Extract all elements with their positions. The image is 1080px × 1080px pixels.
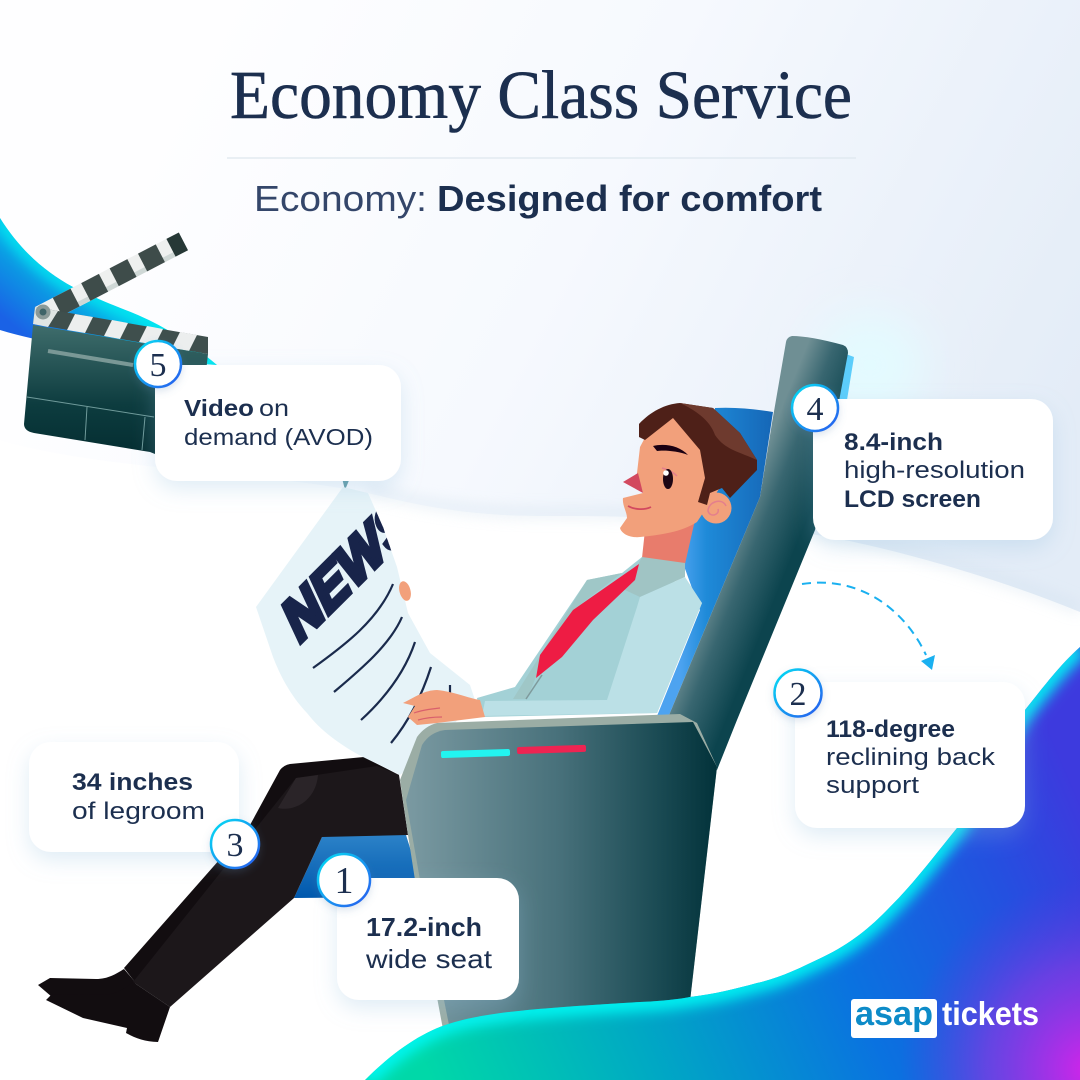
neck	[642, 520, 695, 564]
callout 1: seat width: 17.2-inch	[366, 912, 482, 942]
callout 1: seat width	[318, 854, 519, 1000]
callout 3: legroom: of legroom	[72, 798, 205, 825]
logo: asap tickets	[851, 995, 1039, 1038]
nose	[623, 473, 643, 493]
man: hand	[403, 690, 485, 725]
logo: asap tickets: tickets	[942, 995, 1039, 1032]
callout 2: reclining back support: 118-degree	[826, 716, 955, 743]
clapper stripe bar	[33, 307, 208, 354]
number badge 5: 5	[150, 347, 166, 384]
number badge 3	[211, 820, 259, 868]
tie	[536, 564, 639, 678]
clapper arm	[35, 232, 188, 325]
subtitle	[254, 178, 822, 219]
hair	[639, 403, 757, 505]
number badge 2	[774, 670, 822, 716]
clapper hinge	[36, 304, 50, 320]
number badge 4: 4	[806, 391, 824, 428]
wave edge shading	[368, 490, 1080, 609]
subtitle: Economy:	[254, 178, 427, 219]
number badge 1: 1	[334, 860, 354, 902]
armrest red light	[517, 745, 586, 754]
logo: asap tickets: asap	[855, 995, 933, 1033]
hair highlight	[680, 403, 757, 460]
knee highlight	[278, 775, 318, 809]
man: legs and shoes	[38, 757, 408, 1042]
number badge 1	[318, 854, 370, 906]
eye	[662, 468, 677, 489]
seat: blue head cushion	[657, 408, 773, 720]
icon: clapperboard	[24, 232, 208, 470]
callout 4: LCD screen: LCD screen	[844, 486, 981, 513]
callout 2: reclining back support: support	[826, 772, 919, 799]
newspaper headline: NEWS	[275, 480, 420, 657]
back shoe	[38, 969, 136, 997]
clapper body	[24, 325, 208, 470]
seat: light blue sliver	[838, 354, 854, 400]
arrow: dashed recline arrow	[802, 583, 935, 670]
eyebrow	[653, 445, 688, 455]
front leg	[133, 766, 408, 1007]
newspaper	[256, 480, 475, 775]
ear	[700, 492, 732, 524]
seat: armrest and base	[400, 714, 717, 1040]
background: white wave	[0, 440, 1080, 1080]
mouth	[628, 506, 651, 509]
top-left gradient wave	[0, 218, 217, 365]
callout 4: LCD screen: high-resolution	[844, 457, 1025, 484]
background: soft cyan glow	[815, 315, 925, 415]
callout 5: video on demand: demand (AVOD)	[184, 424, 373, 450]
callout 2: reclining back support: reclining back	[826, 744, 996, 771]
callout 2: reclining back support	[774, 670, 1025, 828]
armrest cyan light	[441, 749, 510, 758]
thumb	[397, 580, 413, 602]
callout 5: video on demand: Video	[184, 395, 254, 421]
bottom-right gradient wave	[360, 640, 1080, 1080]
seat: backrest	[660, 336, 848, 770]
seat: blue cushion under legs	[294, 835, 420, 898]
man: head and neck	[620, 403, 757, 564]
number badge 3: 3	[226, 827, 244, 864]
callout 3: legroom	[29, 742, 259, 868]
back leg	[124, 757, 399, 982]
callout 5: video on demand: on	[259, 395, 289, 421]
newspaper text lines	[313, 584, 450, 743]
callout 3: legroom: 34 inches	[72, 769, 193, 796]
title: Economy Class Service	[230, 57, 852, 133]
number badge 4	[792, 385, 838, 431]
callout 1: seat width: wide seat	[365, 944, 493, 974]
face	[620, 415, 725, 537]
callout 5: video on demand	[135, 341, 401, 481]
small seat strip behind newspaper	[342, 478, 350, 490]
man: shirt	[477, 557, 702, 717]
shirt placket	[526, 675, 542, 699]
front shoe	[46, 982, 170, 1042]
number badge 2: 2	[790, 676, 806, 713]
background: pale gradient area	[0, 0, 1080, 700]
number badge 5	[135, 341, 181, 387]
callout 4: LCD screen: 8.4-inch	[844, 429, 943, 456]
callout 4: LCD screen	[792, 385, 1053, 540]
subtitle: Designed for comfort	[437, 178, 822, 219]
